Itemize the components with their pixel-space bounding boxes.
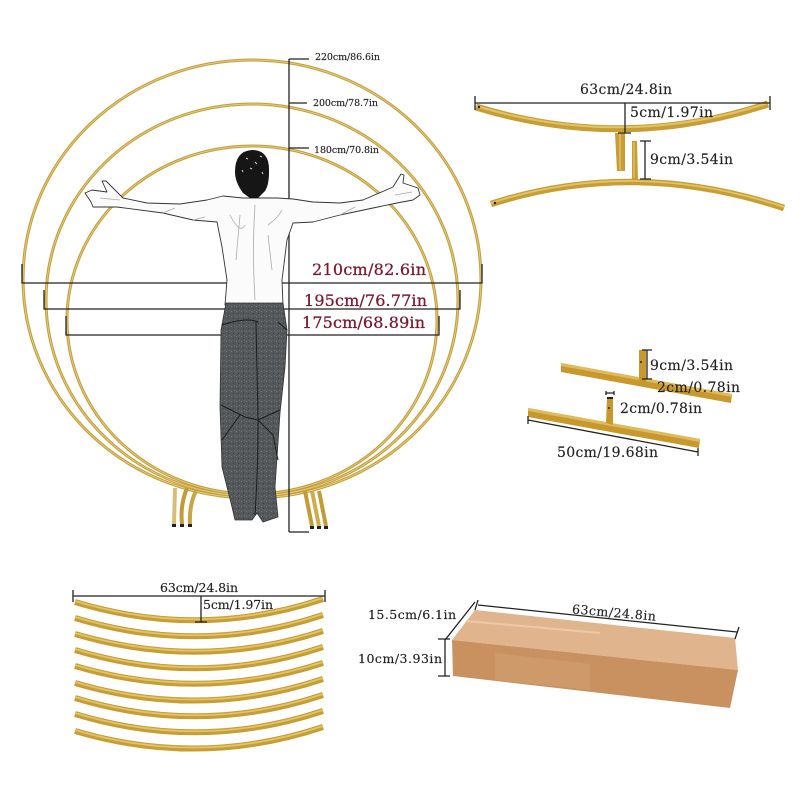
label: 5cm top-right: 5cm/1.97in [630, 105, 713, 121]
label: 9cm top-right: 9cm/3.54in [650, 152, 733, 168]
arch legs: right group [305, 491, 328, 529]
height dimension scale [289, 59, 309, 532]
label: 63cm rails: 63cm/24.8in [160, 580, 238, 595]
label: 2cm post width: 2cm/0.78in [620, 401, 702, 417]
hair [235, 150, 269, 198]
top-right part: lower curved rail with post [491, 141, 784, 208]
height label: 200cm: 200cm/78.7in [313, 98, 378, 109]
height label: 220cm: 220cm/86.6in [315, 52, 380, 63]
torso and arms [85, 174, 420, 305]
width label: 175cm: 175cm/68.89in [302, 313, 425, 332]
arch legs: left group [172, 488, 196, 527]
label: 63cm top-right: 63cm/24.8in [580, 82, 672, 98]
trousers [220, 303, 287, 522]
bottom-left: nine curved rail segments [75, 598, 323, 749]
height label: 180cm: 180cm/70.8in [314, 145, 379, 156]
label: 15.5cm box depth: 15.5cm/6.1in [368, 607, 456, 622]
width dimension line: 175cm [66, 316, 439, 335]
label: 50cm base length: 50cm/19.68in [557, 445, 658, 461]
cardboard shipping box [452, 610, 738, 708]
width label: 210cm: 210cm/82.6in [312, 260, 426, 279]
label: 10cm box height: 10cm/3.93in [358, 651, 442, 666]
top-right part: upper curved rail with post [476, 103, 768, 171]
middle-right part: upper base bar with post [561, 350, 732, 403]
box top face [452, 610, 738, 670]
width dimension line: 210cm [22, 264, 482, 283]
label: 2cm base bar: 2cm/0.78in [657, 380, 740, 396]
middle-right part: lower base bar with post [528, 397, 700, 448]
width label: 195cm: 195cm/76.77in [304, 291, 427, 310]
label: 63cm box length: 63cm/24.8in [572, 601, 657, 624]
top-right dimension lines [475, 96, 770, 179]
middle-right dimension lines [528, 350, 698, 456]
main arch: three gold rings [23, 60, 481, 498]
bottom-left dimension lines [73, 590, 325, 622]
box front face [452, 640, 738, 708]
label: 5cm rails: 5cm/1.97in [203, 597, 273, 612]
label: 9cm base post: 9cm/3.54in [650, 358, 733, 374]
box dimension lines [438, 600, 739, 676]
width dimension line: 195cm [44, 290, 460, 309]
person seen from behind, arms outstretched [85, 150, 420, 522]
